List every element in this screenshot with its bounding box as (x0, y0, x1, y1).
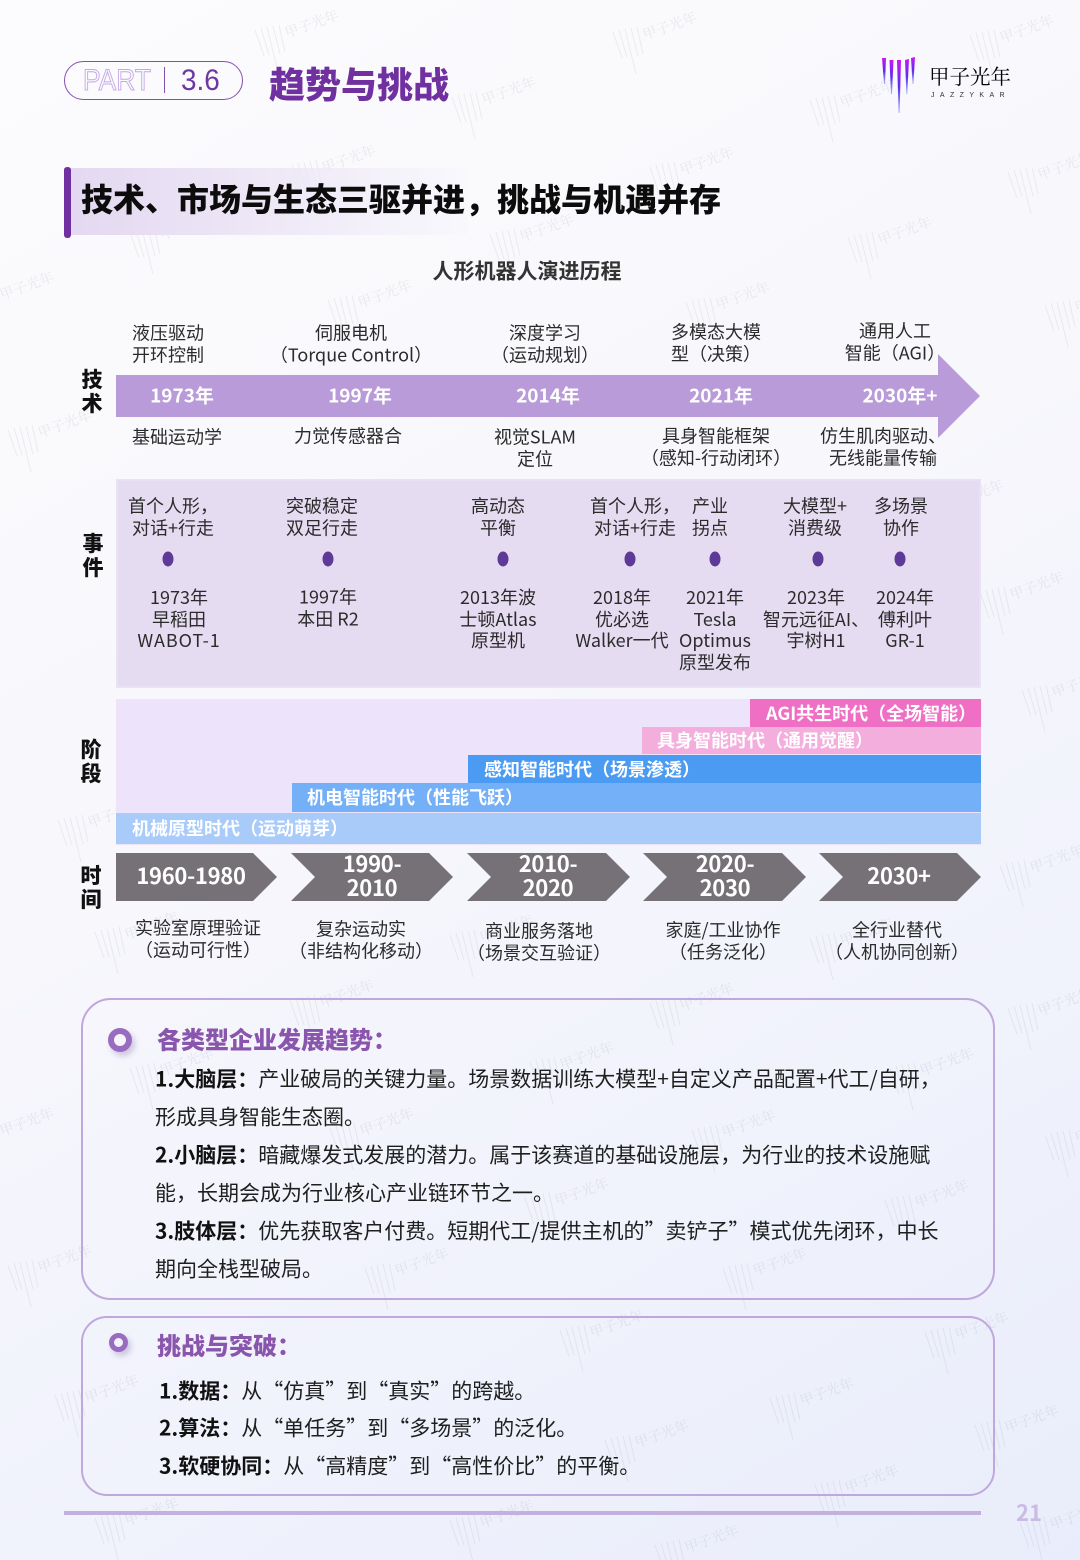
row label: 事件 (82, 528, 104, 582)
event: LLM + consumer: 大模型+ (783, 492, 847, 518)
event: industry inflection (692, 492, 728, 540)
text: 甲子光年 (797, 1373, 856, 1411)
trend line 1: 1.大脑层：产业破局的关键力量。场景数据训练大模型+自定义产品配置+代工/自研， (155, 1063, 941, 1093)
text: 甲子光年 (632, 1415, 691, 1453)
time note: commercial: （场景交互验证） (467, 939, 611, 965)
page title: 趋势与挑战 (269, 56, 449, 108)
text: 甲子光年 (477, 910, 536, 948)
row label: 技术 (82, 364, 102, 418)
tech arrow (116, 354, 980, 438)
text: 甲子光年 (479, 72, 538, 110)
tech above: AGI (845, 318, 945, 365)
text: 甲子光年 (837, 75, 896, 113)
milestone: Optimus: 2021年 (686, 584, 744, 610)
time note: lab: （运动可行性） (135, 936, 261, 962)
milestone: Walker: Walker一代 (575, 627, 669, 653)
row label: 时间: 时 (80, 860, 102, 890)
text: 甲子光年 (157, 1043, 216, 1081)
milestone: GR-1: 2024年 (876, 584, 934, 610)
milestone: Walker: 2018年 (593, 584, 651, 610)
subtitle text: 技术、市场与生态三驱并进，挑战与机遇并存 (81, 175, 721, 221)
time note: complex motion (289, 916, 433, 963)
stage: embodied (642, 727, 981, 754)
tech below: vision SLAM (494, 424, 576, 471)
stage: perception: 感知智能时代（场景渗透） (484, 756, 700, 782)
text: 甲子光年 (713, 277, 772, 315)
stage: mechatronic: 机电智能时代（性能飞跃） (307, 784, 523, 810)
milestone: Atlas (459, 584, 537, 653)
event: industry inflection: 产业 (692, 492, 728, 518)
milestone: Atlas: 士顿Atlas (459, 605, 537, 631)
text: 甲子光年 (947, 475, 1006, 513)
event: multi scene: 多场景 (874, 492, 928, 518)
milestone: Unitree H1: 宇树H1 (786, 627, 846, 653)
text: 甲子光年 (677, 142, 736, 180)
text: 甲子光年 (122, 1493, 181, 1531)
tech below: force sensing: 力觉传感器合 (294, 422, 402, 448)
page number: 21 (1016, 1496, 1042, 1528)
tech year: 1973: 1973年 (150, 382, 214, 409)
tech year: 2021: 2021年 (689, 382, 753, 409)
tech above: hydraulic: 开环控制 (132, 341, 204, 367)
tech above: multimodal (671, 318, 761, 366)
event: LLM + consumer (783, 492, 847, 540)
text: 甲子光年 (640, 7, 699, 45)
badge number: 3.6 (181, 64, 220, 97)
milestone: Honda R2 (297, 584, 359, 631)
time: 2010-2020: 2010- (519, 847, 577, 879)
tech below: embodied framework: 具身智能框架 (662, 422, 770, 448)
milestone: Walker: 优必选 (595, 605, 649, 631)
text: 甲子光年 (750, 1243, 809, 1281)
trends body text (155, 1060, 975, 1288)
stage: AGI: AGI共生时代（全场智能） (766, 700, 976, 726)
icon: ring bullet (108, 1028, 132, 1052)
tech above: servo: 伺服电机 (315, 320, 387, 346)
milestone: Atlas: 原型机 (471, 627, 525, 653)
text: 甲子光年 (517, 209, 576, 247)
icon: logo bars (882, 57, 915, 113)
time: 2010-2020 (519, 847, 577, 903)
milestone: GR-1 (876, 584, 934, 653)
event: dynamic balance: 高动态 (471, 492, 525, 518)
trend line 4: 能，长期会成为行业核心产业链环节之一。 (155, 1177, 554, 1207)
tech below: embodied framework: （感知-行动闭环） (641, 444, 791, 470)
tech above: multimodal: 多模态大模 (671, 318, 761, 344)
milestone: Unitree H1: 2023年 (787, 584, 845, 610)
tech above: hydraulic: 液压驱动 (132, 320, 204, 346)
milestone: Unitree H1: 智元远征AI、 (763, 605, 869, 631)
milestone: WABOT-1: 1973年 (150, 584, 208, 610)
event: first humanoid 2018: 首个人形， (590, 492, 680, 518)
time note: full replacement (825, 916, 969, 964)
text: 甲子光年 (157, 207, 216, 245)
tech above: deep learning: （运动规划） (491, 341, 599, 367)
tech above: deep learning: 深度学习 (509, 320, 581, 346)
time note: home/industry: （任务泛化） (669, 938, 777, 964)
time note: full replacement: 全行业替代 (852, 916, 942, 942)
text: 甲子光年 (587, 1305, 646, 1343)
time note: lab (135, 914, 261, 962)
milestone: Atlas: 2013年波 (460, 584, 536, 610)
milestone: GR-1: GR-1 (885, 627, 925, 653)
text: 甲子光年 (875, 212, 934, 250)
text: 甲子光年 (997, 10, 1056, 48)
text: 甲子光年 (1002, 1400, 1061, 1438)
row label: 技术: 术 (82, 388, 102, 418)
row label: 时间 (80, 860, 102, 914)
time note: commercial: 商业服务落地 (485, 918, 593, 944)
time: 1990-2010: 1990- (343, 847, 401, 879)
text: 甲子光年 (357, 1103, 416, 1141)
text: 甲子光年 (677, 978, 736, 1016)
text: 甲子光年 (282, 5, 341, 43)
text: 甲子光年 (319, 140, 378, 178)
trends heading: 各类型企业发展趋势： (157, 1021, 397, 1056)
milestone: Unitree H1 (763, 584, 869, 653)
text: 甲子光年 (552, 1173, 611, 1211)
challenges heading: 挑战与突破： (157, 1327, 301, 1362)
panel: events (116, 479, 981, 688)
text: 甲子光年 (719, 1105, 778, 1143)
challenge: hardware-software: 3.软硬协同：从“高精度”到“高性价比”的平衡。 (159, 1450, 640, 1480)
milestone: WABOT-1: WABOT-1 (137, 627, 221, 653)
row label: 事件: 件 (82, 552, 104, 582)
time: 2010-2020: 2020 (523, 871, 573, 903)
text: 甲子光年 (35, 1240, 94, 1278)
event: dynamic balance (471, 492, 525, 540)
milestone: Honda R2: 1997年 (299, 584, 357, 610)
tech below: bionic muscle: 无线能量传输 (829, 444, 937, 470)
text: 甲子光年 (82, 1370, 141, 1408)
milestone: Optimus: Optimus (679, 627, 751, 653)
stage: mechanical: 机械原型时代（运动萌芽） (132, 815, 348, 841)
row label: 时间: 间 (80, 884, 102, 914)
event: stable biped (286, 492, 358, 540)
chart title: 人形机器人演进历程 (432, 255, 622, 285)
text: 甲子光年 (1007, 567, 1066, 605)
panel: challenges (81, 1316, 995, 1496)
milestone: WABOT-1 (137, 584, 221, 653)
time: 1960-1980: 1960-1980 (136, 859, 246, 891)
time note: full replacement: （人机协同创新） (825, 938, 969, 964)
text: 甲子光年 (557, 1037, 616, 1075)
text: 甲子光年 (682, 1520, 741, 1558)
logo latin wordmark: JAZZYKAR (931, 92, 1010, 99)
tech above: AGI: 智能（AGI） (845, 339, 945, 365)
text: 甲子光年 (952, 1307, 1011, 1345)
trend line 5: 3.肢体层：优先获取客户付费。短期代工/提供主机的”卖铲子”模式优先闭环，中长 (155, 1215, 938, 1245)
subtitle banner (64, 167, 721, 238)
text: 甲子光年 (917, 1043, 976, 1081)
time note: lab: 实验室原理验证 (135, 914, 261, 940)
tech below: vision SLAM: 视觉SLAM (494, 424, 576, 450)
text: 甲子光年 (317, 975, 376, 1013)
time note: home/industry (665, 916, 781, 964)
stage: mechanical (116, 813, 981, 844)
time: 2020-2030: 2020- (696, 847, 754, 879)
milestone: Optimus: Tesla (693, 606, 737, 632)
time note: home/industry: 家庭/工业协作 (665, 916, 781, 942)
event: stable biped: 突破稳定 (286, 492, 358, 518)
milestone: Honda R2: 本田 R2 (297, 605, 359, 631)
event: first humanoid 2018 (590, 492, 680, 540)
time: 2030+: 2030+ (867, 859, 931, 891)
text: 甲子光年 (837, 913, 896, 951)
event: multi scene (874, 492, 928, 540)
milestone: Optimus (679, 584, 751, 674)
panel: enterprise trends (81, 998, 995, 1300)
event: first humanoid 1973: 首个人形， (128, 492, 218, 518)
time note: complex motion: （非结构化移动） (289, 937, 433, 963)
logo wordmark: 甲子光年 (929, 60, 1011, 90)
row label: 阶段: 阶 (80, 734, 102, 764)
stage: embodied: 具身智能时代（通用觉醒） (657, 727, 873, 753)
tech year: 2014: 2014年 (516, 382, 580, 409)
tech above: AGI: 通用人工 (859, 318, 931, 344)
row label: 阶段: 段 (80, 758, 102, 788)
trend line 2: 形成具身智能生态圈。 (155, 1101, 365, 1131)
tech below: embodied framework (641, 422, 791, 470)
time: 2020-2030 (696, 847, 754, 903)
tech above: servo: （Torque Control） (270, 341, 432, 367)
time: 1990-2010 (343, 847, 401, 903)
tech year: 1997: 1997年 (328, 382, 392, 409)
text: 甲子光年 (85, 795, 144, 833)
text: 甲子光年 (477, 1495, 536, 1533)
row label: 技术: 技 (82, 364, 102, 394)
tech below: bionic muscle: 仿生肌肉驱动、 (820, 422, 946, 448)
stage: perception (468, 755, 981, 784)
challenge: data: 1.数据：从“仿真”到“真实”的跨越。 (159, 1375, 535, 1405)
milestone: Walker (575, 584, 669, 653)
tech below: vision SLAM: 定位 (517, 445, 553, 471)
text: 甲子光年 (392, 1243, 451, 1281)
text: 甲子光年 (355, 275, 414, 313)
milestone: WABOT-1: 早稻田 (152, 605, 206, 631)
section badge: PART 3.6 (64, 61, 243, 100)
row label: 事件: 事 (82, 528, 104, 558)
text: 甲子光年 (912, 1175, 971, 1213)
milestone: GR-1: 傅利叶 (878, 605, 932, 631)
tech above: servo (270, 320, 432, 367)
time note: complex motion: 复杂运动实 (316, 916, 406, 942)
icon: ring bullet (109, 1333, 128, 1352)
time note: commercial (467, 918, 611, 965)
panel: stages (116, 699, 981, 845)
text: 甲子光年 (122, 907, 181, 945)
event: first humanoid 2018: 对话+行走 (594, 514, 676, 540)
event dot markers (162, 552, 906, 566)
milestone: Optimus: 原型发布 (679, 648, 751, 674)
time: 2020-2030: 2030 (700, 871, 750, 903)
event: stable biped: 双足行走 (286, 514, 358, 540)
trend line 6: 期向全栈型破局。 (155, 1253, 323, 1283)
time: 1990-2010: 2010 (347, 871, 397, 903)
time chevrons (116, 853, 981, 901)
tech above: multimodal: 型（决策） (671, 340, 761, 366)
event: first humanoid 1973 (128, 492, 218, 540)
tech above: deep learning (491, 320, 599, 367)
event: first humanoid 1973: 对话+行走 (132, 514, 214, 540)
event: LLM + consumer: 消费级 (788, 514, 842, 540)
trend line 3: 2.小脑层：暗藏爆发式发展的潜力。属于该赛道的基础设施层，为行业的技术设施赋 (155, 1139, 930, 1169)
event: dynamic balance: 平衡 (480, 514, 516, 540)
tech below: basic motion: 基础运动学 (132, 423, 222, 449)
logo: Jazzykar (882, 57, 1011, 113)
text: 甲子光年 (35, 405, 94, 443)
tech above: hydraulic (132, 320, 204, 367)
tech year: 2030+: 2030年+ (862, 382, 938, 409)
row label: 阶段 (80, 734, 102, 788)
tech below: bionic muscle (820, 422, 946, 470)
stage: mechatronic (292, 783, 981, 812)
text: 甲子光年 (842, 1460, 901, 1498)
event: multi scene: 协作 (883, 514, 919, 540)
event: industry inflection: 拐点 (692, 514, 728, 540)
challenge: algorithm: 2.算法：从“单任务”到“多场景”的泛化。 (159, 1412, 577, 1442)
